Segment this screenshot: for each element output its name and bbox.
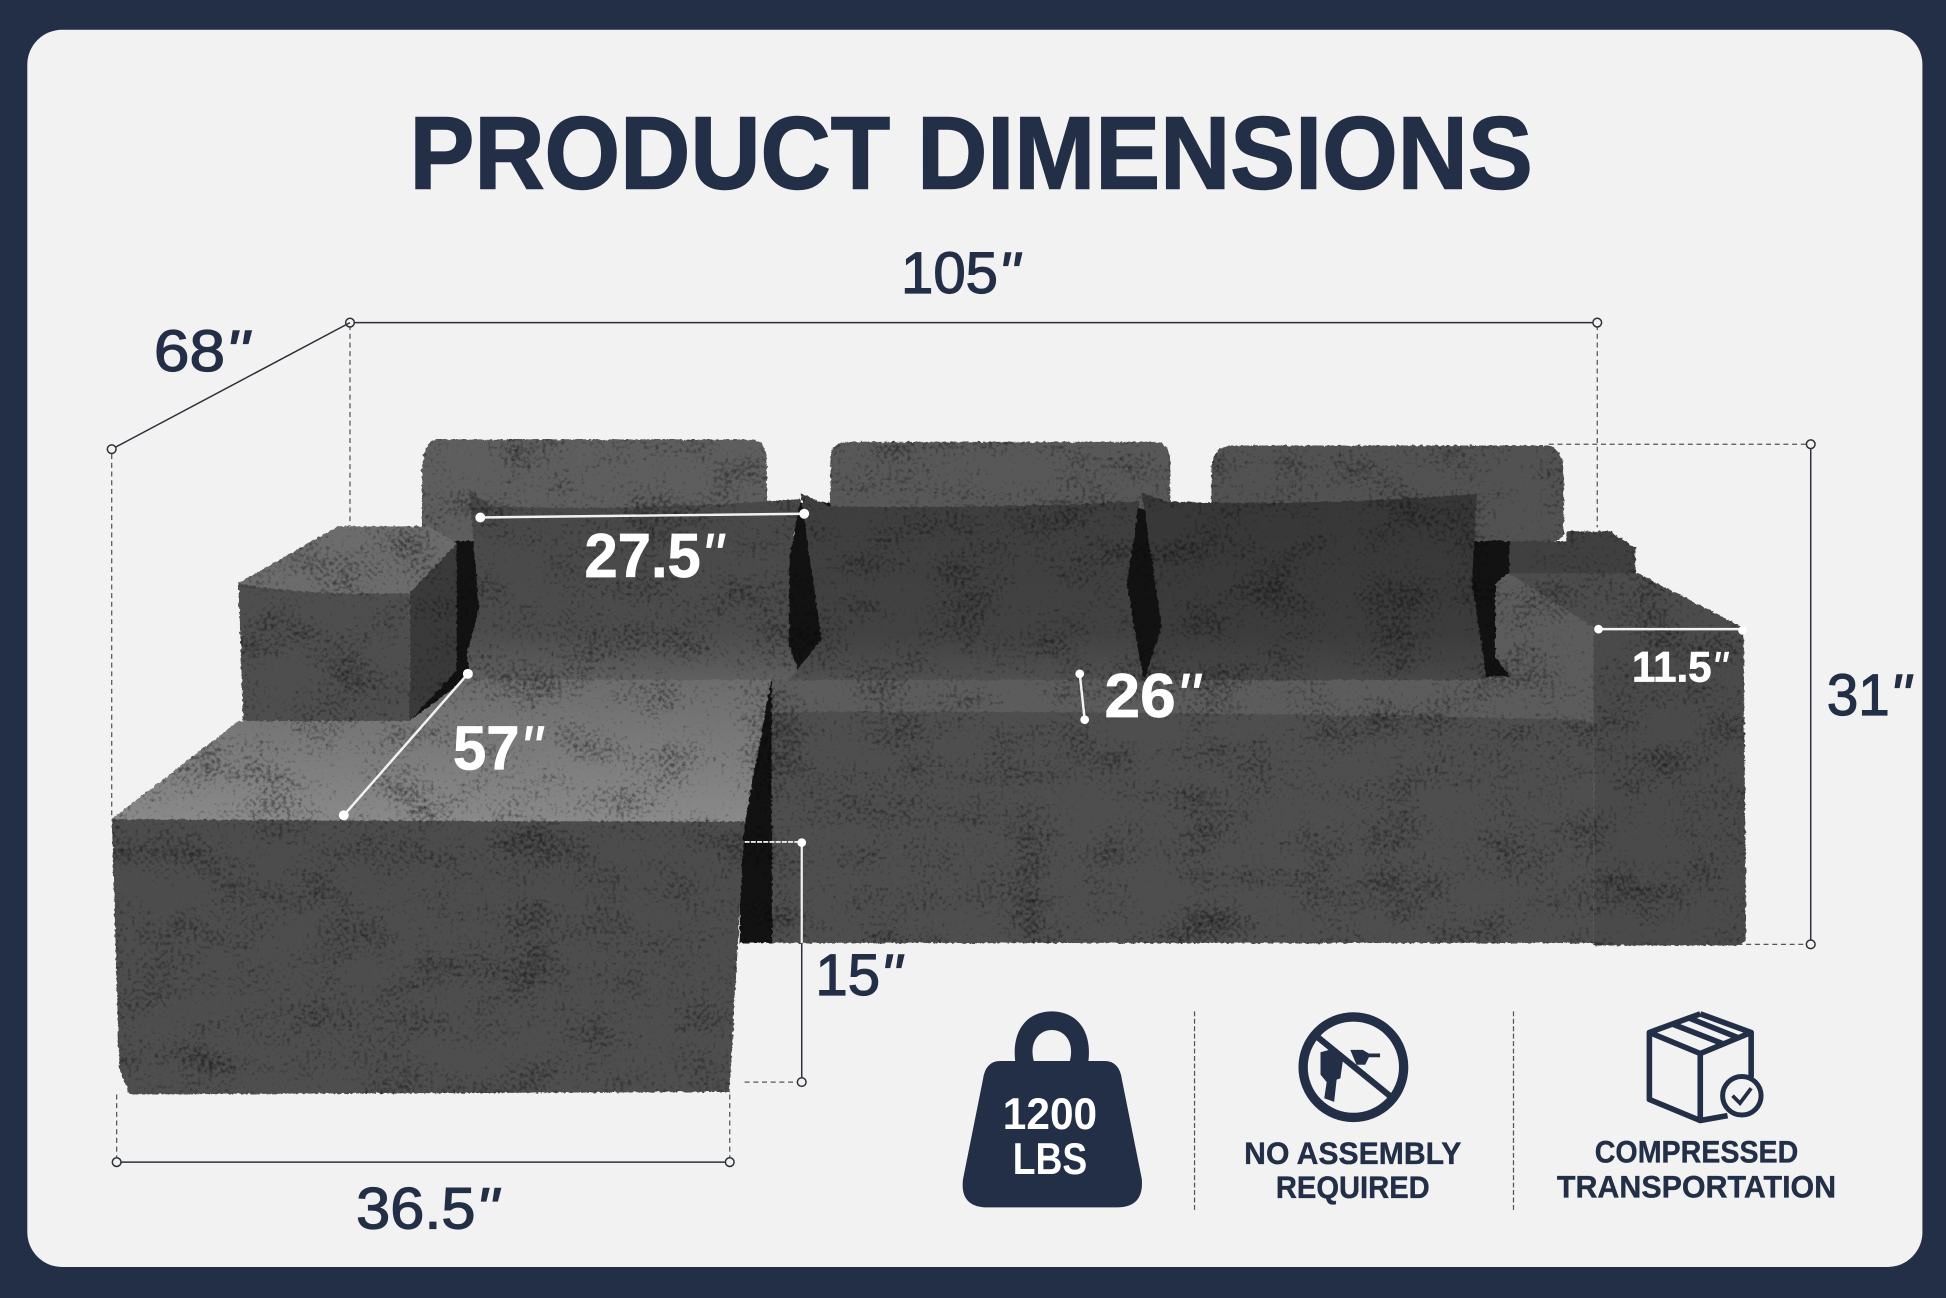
divider	[1512, 1011, 1514, 1210]
dimension: chaise width 36.5	[112, 1094, 734, 1242]
dimension: height 31	[1549, 440, 1913, 949]
icon: 1200 lbs weight: LBS	[1013, 1135, 1087, 1184]
dimension: seat depth 57	[339, 669, 544, 820]
sofa photo	[112, 439, 1746, 1094]
dimension: height 31: 31''	[1827, 663, 1913, 728]
dimension: arm width 11.5: 11.5''	[1632, 643, 1730, 690]
dimension: width 105	[346, 241, 1602, 527]
text: compressed transportation	[1557, 1134, 1836, 1204]
right backrest	[1211, 445, 1564, 541]
left armrest	[238, 526, 457, 721]
title: PRODUCT DIMENSIONS	[410, 96, 1533, 211]
text: no assembly required: REQUIRED	[1276, 1169, 1430, 1205]
left pillow	[467, 489, 800, 680]
dimension: width 105: 105''	[901, 241, 1022, 306]
dimension: seat depth 26: 26''	[1105, 662, 1202, 731]
main seat top	[772, 676, 1590, 722]
icon: 1200 lbs weight	[963, 1011, 1142, 1207]
chaise front	[112, 819, 745, 1094]
icon: no drill	[1303, 1017, 1404, 1117]
text: no assembly required: NO ASSEMBLY	[1244, 1135, 1461, 1171]
centre pillow	[789, 493, 1144, 680]
left backrest	[422, 439, 767, 541]
dimension: chaise width 36.5: 36.5''	[356, 1177, 501, 1242]
dimension: depth 68: 68''	[154, 319, 251, 384]
far right arm	[1509, 531, 1636, 577]
chaise top	[112, 676, 772, 824]
dimension: pillow 27.5: 27.5''	[585, 522, 726, 591]
dark interior gaps	[410, 503, 1527, 943]
dimension: depth 68	[107, 319, 350, 819]
icon: 1200 lbs weight: 1200	[1003, 1090, 1097, 1139]
main seat front	[772, 712, 1594, 943]
dimension: arm width 11.5	[1594, 625, 1747, 690]
dimension: seat height 15	[745, 838, 904, 1086]
centre backrest	[830, 442, 1170, 509]
text: compressed transportation: COMPRESSED	[1595, 1134, 1798, 1170]
divider	[1194, 1011, 1196, 1210]
text: compressed transportation: TRANSPORTATION	[1557, 1168, 1836, 1204]
right armrest	[1495, 573, 1746, 946]
text: no assembly required	[1244, 1135, 1461, 1205]
dimension: seat height 15: 15''	[815, 943, 904, 1008]
right pillow	[1142, 493, 1487, 680]
dimension: pillow 27.5	[475, 509, 809, 591]
dimension: seat depth 57: 57''	[453, 714, 544, 783]
icon: compressed box	[1649, 1014, 1761, 1121]
